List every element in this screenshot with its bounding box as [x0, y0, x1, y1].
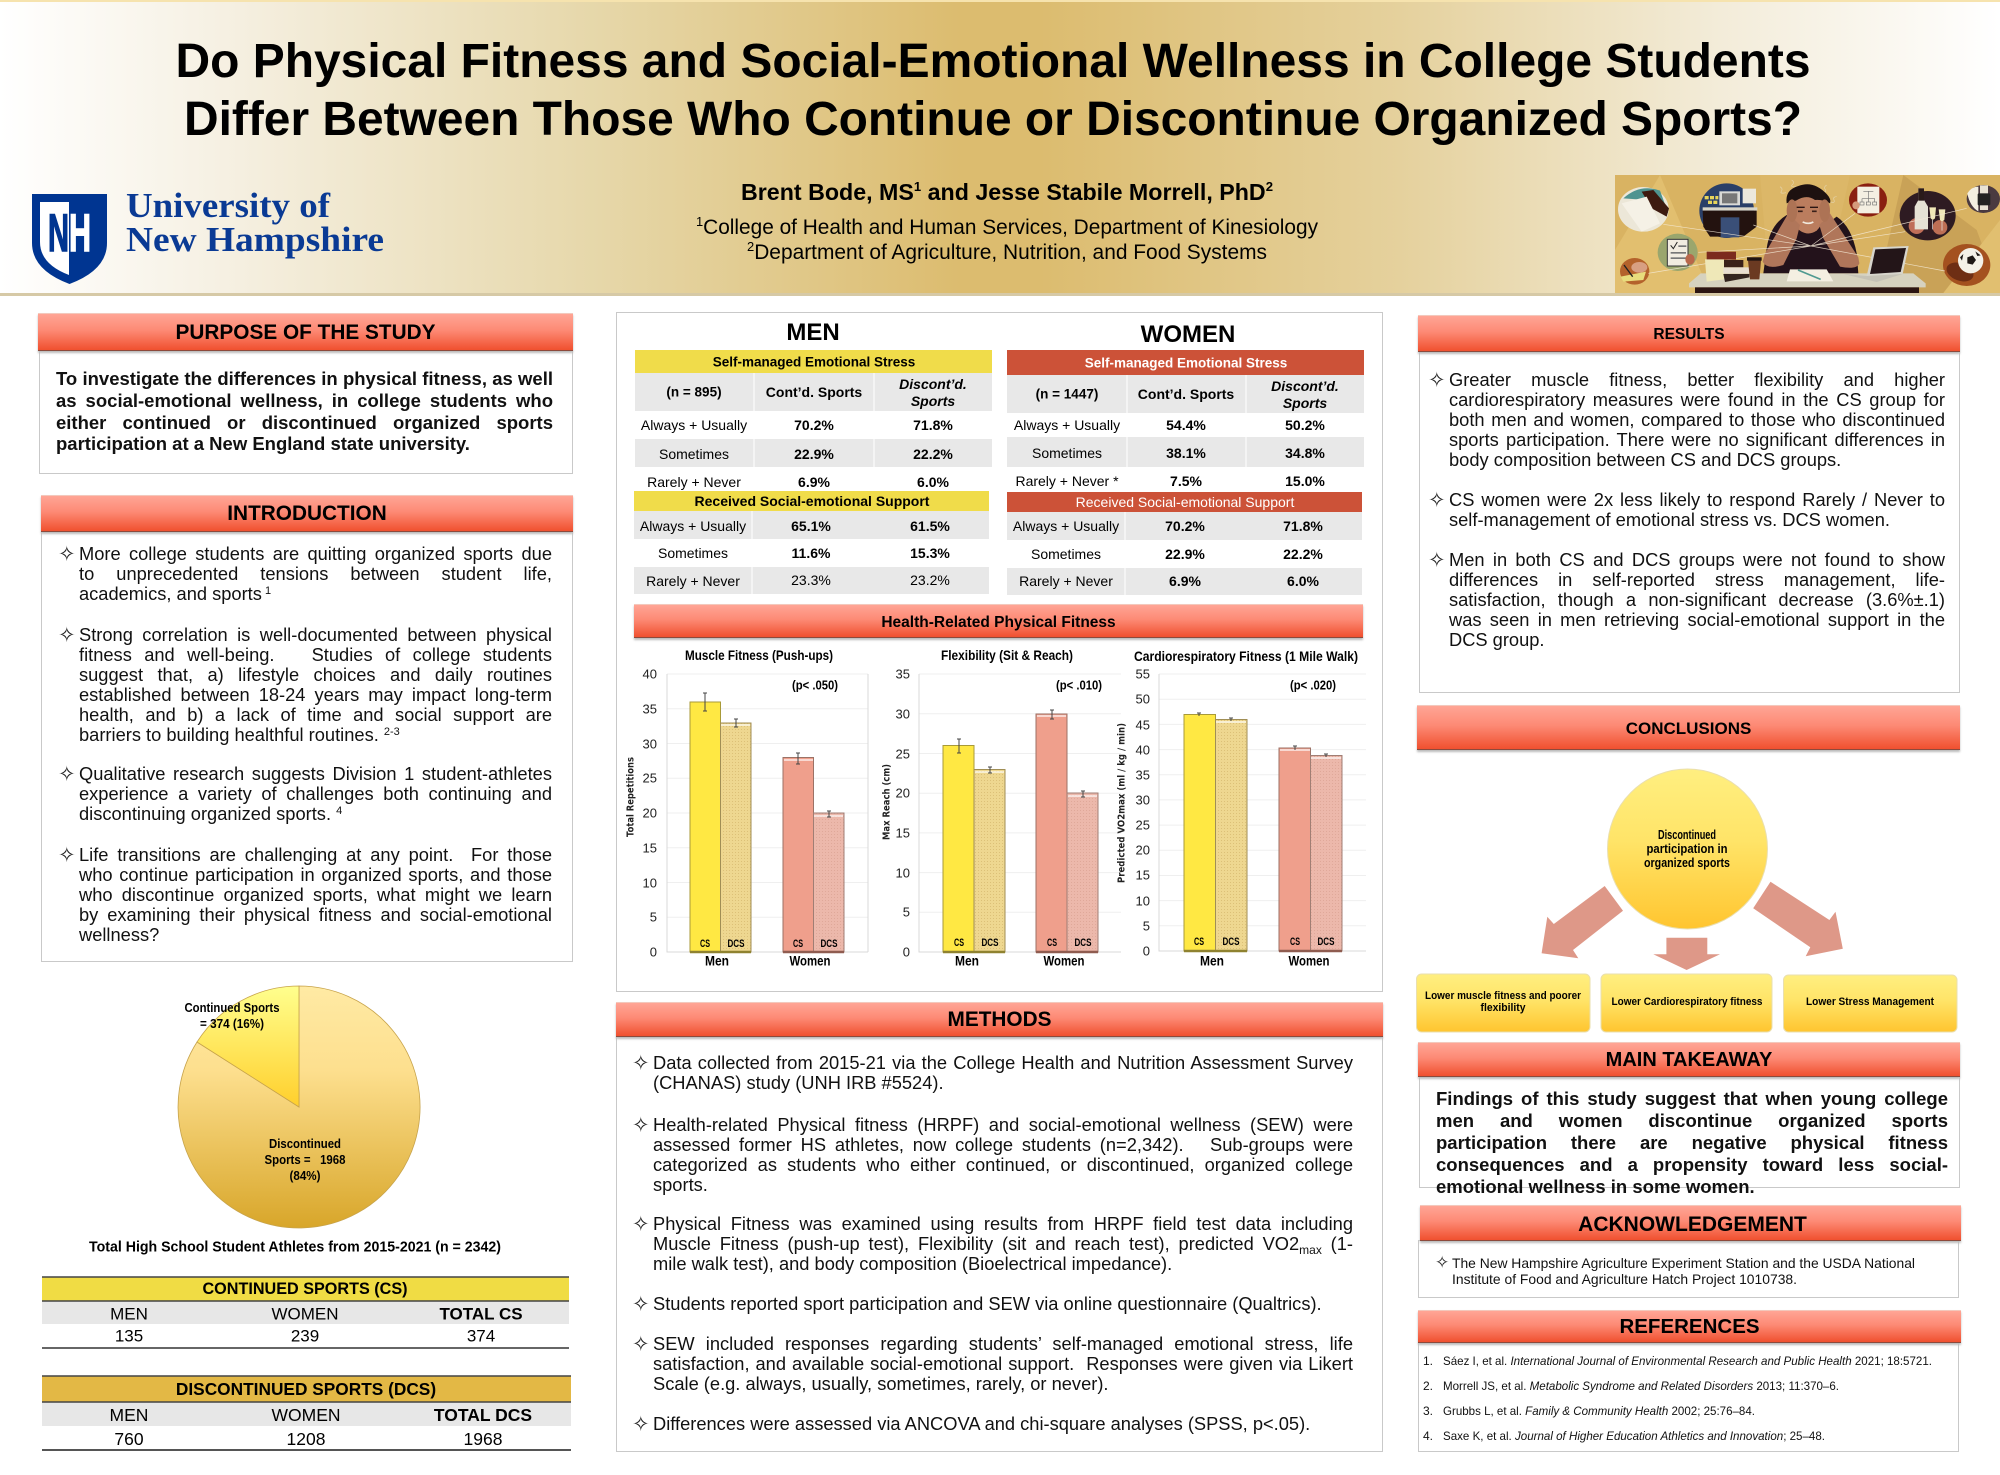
bar chart: muscle fitness: (p< .050)	[792, 678, 838, 692]
bullets: methods: mile walk test), and body composition (Bioelectrical impedance).	[653, 1253, 1172, 1274]
bar chart: muscle fitness: Muscle Fitness (Push-ups)	[685, 647, 833, 663]
bullets: methods: Health-related Physical fitness (HRPF) and social-emotional wellness (SEW) were	[653, 1114, 1353, 1135]
bar chart: cardiorespiratory fitness: 35	[1136, 768, 1150, 782]
bullets: introduction: fitness and well-being. Studies of college students	[79, 644, 552, 665]
text: purpose statement: To investigate the differences in physical fitness, as well	[56, 368, 553, 389]
bar chart: cardiorespiratory fitness: 55	[1136, 666, 1150, 682]
bar chart: flexibility: CS	[954, 937, 964, 949]
heading: main takeaway	[1418, 1042, 1960, 1077]
text: purpose statement	[56, 368, 553, 454]
authors and affiliations: College of Health and Human Services, Department of Kinesiology	[703, 216, 1318, 239]
bullets: introduction: More college students are quitting organized sports due	[79, 543, 552, 564]
bullets: results: differences in self-reported stress management, life-	[1449, 569, 1945, 590]
table: men received social-emotional support: Received Social-emotional Support	[695, 493, 930, 509]
table: men self-managed emotional stress: 6.9%	[798, 474, 831, 490]
table: continued sports: MEN	[110, 1304, 148, 1324]
panel: references	[1418, 1342, 1959, 1452]
title	[176, 35, 1810, 146]
panel: introduction	[41, 531, 573, 962]
heading: health-related physical fitness: Health-Related Physical Fitness	[881, 614, 1116, 631]
authors and affiliations: 2	[747, 239, 754, 254]
table: women self-managed emotional stress: Sometimes	[1032, 445, 1102, 461]
text: references list: Sáez I, et al. International Journal of Environmental Research and Public Health 2021; 18:5721.	[1443, 1354, 1932, 1368]
table: men self-managed emotional stress: Self-managed Emotional Stress	[713, 354, 915, 370]
text: acknowledgement: Institute of Food and Agriculture Hatch Project 1010738.	[1452, 1271, 1797, 1287]
text: main takeaway	[1436, 1088, 1948, 1197]
bullets: results: CS women were 2x less likely to respond Rarely / Never to	[1449, 489, 1945, 510]
bar chart: cardiorespiratory fitness: 15	[1136, 868, 1150, 882]
bullets: methods: Scale (e.g. always, usually, sometimes, rarely, or never).	[653, 1373, 1108, 1394]
table: women self-managed emotional stress: Always + Usually	[1014, 417, 1120, 433]
table: women self-managed emotional stress: Rarely + Never *	[1015, 473, 1119, 489]
bar chart: cardiorespiratory fitness: 10	[1136, 894, 1150, 908]
bar chart: cardiorespiratory fitness: DCS	[1222, 936, 1240, 948]
text: main takeaway: emotional wellness in some women.	[1436, 1176, 1755, 1197]
heading: introduction: INTRODUCTION	[227, 502, 387, 525]
table: women self-managed emotional stress: Cont’d. Sports	[1138, 386, 1234, 402]
table: women received social-emotional support: Received Social-emotional Support	[1076, 494, 1294, 510]
bar chart: flexibility: 5	[903, 904, 910, 920]
arrow: centre	[1653, 938, 1720, 970]
outcome box: cardiorespiratory: Lower Cardiorespiratory fitness	[1612, 996, 1762, 1008]
heading: men: MEN	[786, 319, 840, 346]
bar chart: cardiorespiratory fitness: Cardiorespiratory Fitness (1 Mile Walk)	[1134, 648, 1358, 664]
panel: acknowledgement	[1418, 1240, 1959, 1298]
authors and affiliations: Department of Agriculture, Nutrition, and Food Systems	[754, 241, 1267, 264]
bullets: methods	[632, 1051, 1353, 1436]
bullets: methods: ✧	[632, 1051, 650, 1075]
table: women self-managed emotional stress: 54.4%	[1166, 417, 1206, 433]
bullets: results: cardiorespiratory measures were found in the CS group for	[1449, 389, 1945, 410]
heading: acknowledgement	[1420, 1205, 1961, 1241]
heading: purpose of the study: PURPOSE OF THE STUDY	[176, 320, 436, 344]
bullets: introduction: barriers to building healthful routines. 2-3	[79, 724, 400, 745]
table: women received social-emotional support: 6.9%	[1169, 573, 1202, 589]
bullets: results: DCS group.	[1449, 629, 1545, 650]
table: women received social-emotional support: Always + Usually	[1013, 518, 1119, 534]
table: continued sports	[42, 1276, 569, 1349]
table: women received social-emotional support: 22.9%	[1165, 546, 1205, 562]
text: purpose statement: participation at a New England state university.	[56, 433, 470, 454]
heading: methods: METHODS	[948, 1008, 1052, 1031]
outcome box: muscle fitness: flexibility	[1480, 1002, 1526, 1014]
text: references list: 1.	[1423, 1354, 1433, 1368]
bullets: methods: satisfaction, and available social-emotional support. Responses were given via Likert	[653, 1353, 1353, 1374]
bar chart: muscle fitness: Total Repetitions	[626, 757, 636, 837]
heading: results	[1418, 315, 1960, 352]
table: continued sports: CONTINUED SPORTS (CS)	[202, 1280, 408, 1298]
header banner	[0, 0, 2000, 296]
bullets: introduction: to unprecedented tensions between student life,	[79, 563, 552, 584]
heading: conclusions: CONCLUSIONS	[1626, 718, 1751, 738]
bullets: introduction: discontinuing organized sports. 4	[79, 803, 342, 824]
table: discontinued sports: 760	[114, 1429, 144, 1449]
bullets: results: ✧	[1428, 368, 1446, 392]
bullets: results: both men and women, compared to those who discontinued	[1449, 409, 1945, 430]
arrow: left	[1542, 886, 1623, 958]
table: men received social-emotional support: 23.2%	[910, 572, 950, 588]
table: men received social-emotional support: 61.5%	[910, 518, 950, 534]
bullets: introduction: Strong correlation is well-documented between physical	[79, 624, 552, 645]
outcome box: stress management: Lower Stress Management	[1806, 996, 1934, 1008]
central circle: participation in	[1646, 842, 1728, 856]
bar chart: flexibility	[882, 647, 1121, 968]
outcome box: muscle fitness	[1416, 974, 1590, 1032]
bar chart: muscle fitness: 35	[643, 702, 657, 716]
bullets: results: Men in both CS and DCS groups were not found to show	[1449, 549, 1945, 570]
bar chart: flexibility: 15	[896, 826, 910, 840]
bar chart: flexibility: Women	[1044, 954, 1084, 968]
outcome box: stress management	[1784, 975, 1957, 1032]
bullets: results: was seen in men retrieving social-emotional support in the	[1449, 609, 1945, 630]
bar chart: cardiorespiratory fitness: Men	[1200, 954, 1224, 968]
text: references list: Morrell JS, et al. Metabolic Syndrome and Related Disorders 2013; 11:370–6.	[1443, 1379, 1839, 1393]
heading: health-related physical fitness	[634, 604, 1363, 638]
table: discontinued sports: 1208	[287, 1429, 325, 1449]
logo: University of New Hampshire: University of	[126, 186, 330, 225]
text: acknowledgement: ✧	[1435, 1253, 1449, 1273]
heading: women: WOMEN	[1141, 321, 1235, 348]
central circle	[1608, 769, 1768, 929]
illustration: stressed student surrounded by life pressures	[1615, 175, 2000, 293]
bullets: results: body composition between CS and DCS groups.	[1449, 449, 1841, 470]
pie chart: continued vs discontinued sports: Discontinued	[269, 1137, 341, 1151]
bullets: methods: sports.	[653, 1174, 708, 1195]
table: discontinued sports: TOTAL DCS	[434, 1405, 532, 1425]
bullets: methods: categorized as students who either continued, or discontinued, organized college	[653, 1154, 1353, 1175]
bullets: introduction: suggest that, a) lifestyle choices and daily routines	[79, 664, 552, 685]
authors and affiliations	[696, 179, 1318, 264]
table: women received social-emotional support: 70.2%	[1165, 518, 1205, 534]
bar chart: cardiorespiratory fitness: CS	[1194, 936, 1204, 948]
text: references list: 2.	[1423, 1379, 1433, 1393]
text: references list: Saxe K, et al. Journal of Higher Education Athletics and Innovation; 25–48.	[1443, 1429, 1825, 1443]
bar chart: cardiorespiratory fitness: 40	[1136, 742, 1150, 758]
bullets: results: self-management of emotional stress vs. DCS women.	[1449, 509, 1890, 530]
bar chart: muscle fitness: Women	[790, 954, 830, 968]
table: men self-managed emotional stress: Cont’d. Sports	[766, 384, 862, 400]
bullets: methods: ✧	[632, 1292, 650, 1316]
bullets: methods: Physical Fitness was examined using results from HRPF field test data including	[653, 1213, 1353, 1234]
table: discontinued sports: 1968	[464, 1429, 502, 1449]
title: Do Physical Fitness and Social-Emotional Wellness in College Students	[176, 35, 1810, 88]
table: men self-managed emotional stress: Rarely + Never	[647, 474, 741, 490]
bullets: results: sports participation. There were no significant differences in	[1449, 429, 1945, 450]
heading: acknowledgement: ACKNOWLEDGEMENT	[1578, 1212, 1807, 1236]
table: discontinued sports: MEN	[110, 1405, 148, 1425]
bar chart: cardiorespiratory fitness: 25	[1136, 818, 1150, 832]
table: men received social-emotional support: Sometimes	[658, 545, 728, 561]
bar chart: flexibility: 0	[903, 944, 910, 960]
bar chart: flexibility: CS	[1047, 937, 1057, 949]
bar chart: muscle fitness: CS	[793, 938, 803, 950]
table: women self-managed emotional stress: Discont’d.	[1271, 378, 1339, 394]
table: women received social-emotional support	[1007, 492, 1362, 595]
table: women received social-emotional support: 71.8%	[1283, 518, 1323, 534]
text: main takeaway: Findings of this study suggest that when young college	[1436, 1088, 1948, 1109]
bullets: results: Greater muscle fitness, better flexibility and higher	[1449, 369, 1945, 390]
pie chart: continued vs discontinued sports: Continued Sports	[184, 1001, 280, 1015]
bar chart: cardiorespiratory fitness: 0	[1143, 944, 1150, 958]
table: men received social-emotional support: Rarely + Never	[646, 573, 740, 589]
table: discontinued sports: DISCONTINUED SPORTS (DCS)	[176, 1379, 436, 1399]
text: references list: 3.	[1423, 1404, 1433, 1418]
diagram: conclusions flow	[1416, 768, 1958, 1032]
bar chart: muscle fitness: 25	[643, 770, 657, 786]
pie chart: continued vs discontinued sports: = 374 (16%)	[200, 1017, 264, 1031]
bar chart: cardiorespiratory fitness: 20	[1136, 842, 1150, 858]
bar chart: cardiorespiratory fitness: 50	[1136, 692, 1150, 706]
bullets: introduction: ✧	[58, 762, 76, 786]
logo: University of New Hampshire: New Hampshire	[126, 220, 384, 259]
table: men received social-emotional support: Always + Usually	[640, 518, 746, 534]
text: references list: Grubbs L, et al. Family & Community Health 2002; 25:76–84.	[1443, 1404, 1755, 1418]
table: continued sports: WOMEN	[271, 1304, 339, 1324]
logo: University of New Hampshire: H	[69, 204, 91, 263]
bullets: results: satisfaction, though a non-significant decrease (3.6%±.1)	[1449, 589, 1945, 610]
table: men self-managed emotional stress: 22.9%	[794, 446, 834, 462]
bar chart: flexibility: 20	[896, 786, 910, 800]
table: women self-managed emotional stress: 15.0%	[1285, 473, 1325, 489]
bullets: introduction	[58, 542, 552, 945]
bar chart: muscle fitness: 5	[650, 910, 657, 924]
bullets: introduction: experience a variety of challenges both continuing and	[79, 783, 552, 804]
authors and affiliations: and Jesse Stabile Morrell, PhD	[921, 179, 1266, 205]
table: men self-managed emotional stress: 6.0%	[917, 474, 950, 490]
pie chart caption: Total High School Student Athletes from 2015-2021 (n = 2342)	[89, 1238, 501, 1256]
table: discontinued sports	[42, 1375, 571, 1451]
table: men received social-emotional support: 65.1%	[791, 518, 831, 534]
bar chart: flexibility: 30	[896, 706, 910, 722]
table: women self-managed emotional stress: (n = 1447)	[1036, 386, 1098, 402]
bar chart: muscle fitness: 10	[643, 876, 657, 890]
authors and affiliations: Brent Bode, MS	[741, 179, 912, 205]
bullets: introduction: Qualitative research suggests Division 1 student-athletes	[79, 763, 552, 784]
text: main takeaway: men and women discontinue organized sports	[1436, 1110, 1948, 1131]
panel: methods	[616, 1036, 1383, 1452]
table: men self-managed emotional stress: 71.8%	[913, 417, 953, 433]
bullets: introduction: by examining their physical fitness and social-emotional	[79, 904, 552, 925]
table: women self-managed emotional stress: Self-managed Emotional Stress	[1085, 356, 1287, 370]
central circle: Discontinued	[1658, 828, 1716, 842]
table: women self-managed emotional stress: 34.8%	[1285, 445, 1325, 461]
bullets: introduction: ✧	[58, 542, 76, 566]
bullets: methods: Muscle Fitness (push-up test), Flexibility (sit and reach test), predicted VO2max (1-	[653, 1233, 1353, 1257]
table: women self-managed emotional stress: 38.1%	[1166, 445, 1206, 461]
panel: results	[1419, 351, 1960, 693]
bullets: introduction: ✧	[58, 623, 76, 647]
heading: references	[1418, 1310, 1961, 1343]
authors and affiliations: 1	[914, 179, 921, 194]
text: acknowledgement: The New Hampshire Agriculture Experiment Station and the USDA National	[1452, 1255, 1915, 1271]
table: men received social-emotional support	[634, 491, 989, 594]
table: continued sports: TOTAL CS	[439, 1304, 523, 1324]
table: men received social-emotional support: 11.6%	[792, 545, 831, 561]
text: acknowledgement	[1435, 1253, 1915, 1287]
bar chart: cardiorespiratory fitness: Women	[1288, 954, 1330, 968]
bullets: results: ✧	[1428, 488, 1446, 512]
bar chart: muscle fitness: DCS	[820, 938, 838, 950]
text: main takeaway: participation there are negative physical fitness	[1436, 1132, 1948, 1153]
bullets: results	[1428, 368, 1945, 650]
logo: University of New Hampshire	[32, 186, 384, 284]
bullets: introduction: wellness?	[79, 924, 159, 945]
authors and affiliations: 2	[1266, 179, 1273, 194]
heading: purpose of the study	[38, 313, 573, 351]
text: purpose statement: either continued or discontinued organized sports	[56, 412, 553, 433]
heading: main takeaway: MAIN TAKEAWAY	[1606, 1049, 1772, 1071]
bullets: introduction: who continue participation in organized sports, and those	[79, 864, 552, 885]
bar chart: muscle fitness: CS	[700, 938, 710, 950]
table: men self-managed emotional stress: Discont’d.	[899, 376, 967, 392]
bullets: introduction: who discontinue organized sports, what might we learn	[79, 884, 552, 905]
bar chart: cardiorespiratory fitness: 5	[1143, 918, 1150, 934]
bar chart: flexibility: Flexibility (Sit & Reach)	[941, 647, 1073, 663]
table: continued sports: 374	[467, 1326, 495, 1346]
bar chart: flexibility: 10	[896, 866, 910, 880]
bullets: methods: ✧	[632, 1412, 650, 1436]
logo: University of New Hampshire: N	[48, 204, 69, 263]
bullets: methods: Students reported sport participation and SEW via online questionnaire (Qualtrics).	[653, 1293, 1322, 1314]
bullets: methods: ✧	[632, 1113, 650, 1137]
bar chart: muscle fitness: 15	[643, 840, 657, 856]
table: women self-managed emotional stress: Sports	[1283, 395, 1327, 411]
bullets: methods: (CHANAS) study (UNH IRB #5524).	[653, 1072, 944, 1093]
bar chart: flexibility: 35	[896, 666, 910, 682]
arrow: right	[1753, 882, 1843, 956]
bar chart: cardiorespiratory fitness: 30	[1136, 792, 1150, 808]
table: men received social-emotional support: 23.3%	[791, 572, 831, 588]
bar chart: muscle fitness: Men	[705, 954, 729, 968]
bar chart: muscle fitness: 0	[650, 944, 657, 960]
table: continued sports: 239	[291, 1326, 319, 1346]
table: women self-managed emotional stress: 50.2%	[1285, 417, 1325, 433]
table: women received social-emotional support: Sometimes	[1031, 546, 1101, 562]
table: women received social-emotional support: 22.2%	[1283, 546, 1323, 562]
bullets: introduction: established between 18-24 years may impact long-term	[79, 684, 552, 705]
table: men self-managed emotional stress: Sports	[911, 393, 955, 409]
bar chart: cardiorespiratory fitness: 45	[1136, 718, 1150, 732]
heading: results: RESULTS	[1653, 326, 1725, 342]
heading: conclusions	[1417, 705, 1960, 750]
panel: main takeaway	[1419, 1076, 1960, 1188]
table: men self-managed emotional stress: (n = 895)	[666, 384, 722, 400]
bar chart: cardiorespiratory fitness: CS	[1290, 936, 1300, 948]
panel: purpose of the study	[39, 350, 573, 474]
text: references list: 4.	[1423, 1429, 1433, 1443]
bar chart: muscle fitness: 40	[643, 666, 657, 682]
bullets: methods: ✧	[632, 1212, 650, 1236]
bar chart: cardiorespiratory fitness: (p< .020)	[1290, 678, 1336, 692]
bar chart: flexibility: DCS	[982, 937, 998, 949]
bar chart: cardiorespiratory fitness: Predicted VO2max (ml / kg / min)	[1116, 723, 1128, 883]
bar chart: flexibility: DCS	[1074, 937, 1092, 949]
bullets: results: ✧	[1428, 548, 1446, 572]
bullets: methods: ✧	[632, 1332, 650, 1356]
authors and affiliations: 1	[696, 214, 703, 229]
bullets: methods: SEW included responses regarding students’ self-managed emotional stress, life	[653, 1333, 1353, 1354]
table: women received social-emotional support: 6.0%	[1287, 573, 1320, 589]
table: women self-managed emotional stress: 7.5%	[1170, 473, 1203, 489]
text: main takeaway: consequences and a propensity toward less social-	[1436, 1154, 1948, 1175]
table: men received social-emotional support: 15.3%	[910, 545, 950, 561]
heading: references: REFERENCES	[1619, 1315, 1760, 1338]
bar chart: cardiorespiratory fitness: DCS	[1318, 936, 1334, 948]
panel: men and women outcomes with fitness charts	[616, 312, 1383, 992]
pie chart: continued vs discontinued sports: (84%)	[290, 1169, 320, 1183]
bar chart: muscle fitness: DCS	[728, 938, 744, 950]
table: discontinued sports: WOMEN	[271, 1405, 341, 1425]
bar chart: muscle fitness: 20	[643, 806, 657, 820]
outcome box: cardiorespiratory	[1601, 974, 1772, 1032]
title: Differ Between Those Who Continue or Discontinue Organized Sports?	[184, 93, 1802, 146]
pie chart: continued vs discontinued sports	[178, 986, 420, 1228]
bar chart: muscle fitness	[626, 647, 868, 968]
bullets: methods: assessed former HS athletes, now college students (n=2,342). Sub-groups were	[653, 1134, 1353, 1155]
bullets: methods: Differences were assessed via ANCOVA and chi-square analyses (SPSS, p<.05).	[653, 1413, 1310, 1434]
bar chart: muscle fitness: 30	[643, 736, 657, 752]
bullets: introduction: health, and b) a lack of time and social support are	[79, 704, 552, 725]
table: continued sports: 135	[115, 1326, 143, 1346]
bar chart: flexibility: 25	[896, 746, 910, 762]
bar chart: flexibility: (p< .010)	[1056, 678, 1102, 692]
outcome box: muscle fitness: Lower muscle fitness and poorer	[1425, 990, 1582, 1002]
table: men self-managed emotional stress: Always + Usually	[641, 417, 747, 433]
table: men self-managed emotional stress: Sometimes	[659, 446, 729, 462]
bullets: introduction: Life transitions are challenging at any point. For those	[79, 844, 552, 865]
bar chart: flexibility: Men	[955, 954, 979, 968]
bullets: methods: Data collected from 2015-21 via the College Health and Nutrition Assessment Survey	[653, 1052, 1353, 1073]
pie chart: continued vs discontinued sports: Sports = 1968	[264, 1153, 346, 1167]
table: men self-managed emotional stress	[635, 350, 992, 490]
text: purpose statement: as social-emotional wellness, in college students who	[56, 390, 553, 411]
bullets: introduction: ✧	[58, 843, 76, 867]
table: men self-managed emotional stress: 70.2%	[794, 417, 834, 433]
text: references list	[1423, 1354, 1932, 1443]
central circle: organized sports	[1644, 856, 1730, 870]
bar chart: cardiorespiratory fitness	[1116, 648, 1366, 968]
table: men self-managed emotional stress: 22.2%	[913, 446, 953, 462]
heading: introduction	[41, 495, 573, 532]
bar chart: flexibility: Max Reach (cm)	[882, 764, 892, 840]
bullets: introduction: academics, and sports 1	[79, 583, 271, 604]
heading: methods	[616, 1002, 1383, 1037]
table: women self-managed emotional stress	[1007, 350, 1364, 489]
table: women received social-emotional support: Rarely + Never	[1019, 573, 1113, 589]
